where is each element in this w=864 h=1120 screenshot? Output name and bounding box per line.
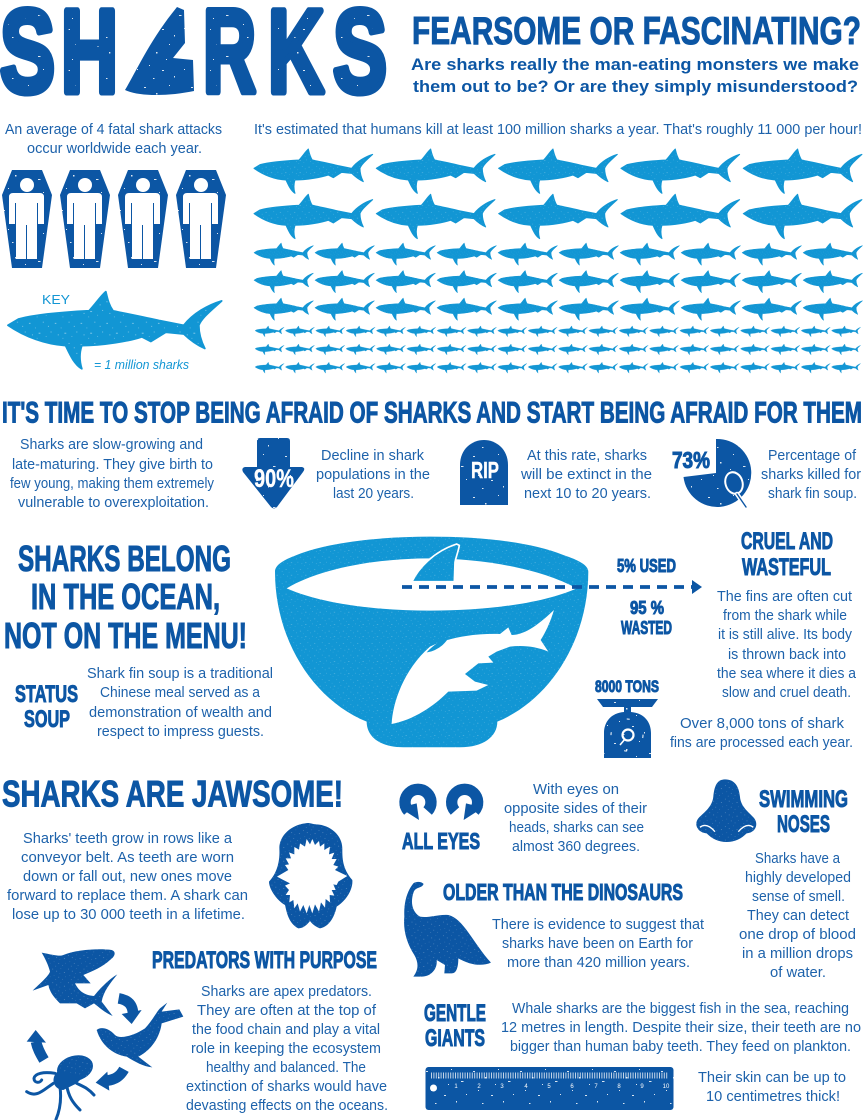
text: fatal attacks [5, 122, 222, 157]
text: teeth: forward to replace them. A shark can [7, 888, 248, 904]
chart: 73% pie with spoon: 73% [672, 447, 710, 473]
text: swimming noses: They can detect [747, 908, 849, 924]
text: status soup: Shark fin soup is a traditional [87, 666, 273, 682]
text: gentle giants: 12 metres in length. Despite their size, their teeth are no [501, 1020, 861, 1036]
chart: 73% pie with spoon [672, 439, 751, 507]
text: humans kill sharks: It's estimated that humans kill at least 100 million sharks a year. That's roughly 11 000 per hour! [254, 122, 862, 138]
heading: older than the dinosaurs: OLDER THAN THE DINOSAURS [443, 879, 683, 905]
text: extinct: At this rate, sharks [527, 448, 647, 464]
icon: dinosaur [404, 882, 491, 977]
text: all eyes: With eyes on [533, 782, 619, 798]
icon: ruler: 8 [617, 1084, 621, 1090]
text: gentle giants: Whale sharks are the biggest fish in the sea, reaching [512, 1001, 849, 1017]
arrow: seal to octopus [96, 1069, 124, 1091]
text: teeth: conveyor belt. As teeth are worn [21, 850, 234, 866]
text: skin [698, 1070, 846, 1105]
text: swimming noses: Sharks have a [755, 851, 840, 867]
arrow: octopus to shark [27, 1030, 46, 1060]
icon: ruler: 9 [640, 1084, 644, 1090]
text: cruel and wasteful: is thrown back into [728, 647, 846, 663]
heading: predators with purpose: PREDATORS WITH PURPOSE [152, 947, 377, 974]
text: teeth [7, 831, 248, 923]
text: swimming noses: in a million drops [742, 946, 853, 962]
text: decline: Decline in shark [321, 448, 425, 464]
text: predators: Sharks are apex predators. [201, 984, 372, 1000]
text: predators: They are often at the top of [197, 1003, 376, 1019]
text: fatal attacks: occur worldwide each year. [27, 141, 202, 157]
text: extinct: next 10 to 20 years. [524, 486, 651, 502]
text: fatal attacks: An average of 4 fatal shark attacks [5, 122, 222, 138]
text: 8000 tons: fins are processed each year. [670, 735, 853, 751]
heading: sharks are jawsome: SHARKS ARE JAWSOME! [2, 772, 343, 814]
text: cruel and wasteful: the sea where it dies a [717, 666, 856, 682]
heading: status soup: STATUS [15, 681, 78, 708]
icon: soup bowl with fin and shark [275, 537, 588, 747]
icon: ruler: 10 [663, 1084, 670, 1090]
pictogram: 100 sharks [254, 149, 862, 373]
text: extinct [520, 448, 652, 502]
text: gentle giants [501, 1001, 861, 1055]
text: slow-growing: vulnerable to overexploitation. [18, 495, 209, 511]
icon: RIP tombstone [460, 440, 508, 505]
text: extinct: will be extinct in the [520, 467, 652, 483]
icon: ruler: 4 [524, 1084, 528, 1090]
heading: swimming noses [759, 786, 848, 838]
heading: sharks belong in the ocean: IN THE OCEAN, [31, 576, 220, 617]
text: swimming noses [739, 851, 856, 981]
text: predators: healthy and balanced. The [206, 1060, 366, 1076]
heading: sharks belong in the ocean [4, 538, 247, 656]
heading: gentle giants: GIANTS [425, 1025, 485, 1052]
text: 8000 tons [670, 716, 853, 751]
text: cruel and wasteful: from the shark while [723, 608, 847, 624]
text: slow-growing [10, 437, 215, 511]
text: cruel and wasteful: The fins are often cut [717, 589, 852, 605]
heading: cruel and wasteful [741, 528, 833, 581]
key: KEY [42, 292, 70, 307]
heading: sharks belong in the ocean: NOT ON THE MENU! [4, 615, 247, 656]
icon: ruler: 6 [570, 1084, 574, 1090]
text: predators: role in keeping the ecosystem [191, 1041, 381, 1057]
icon: 8000 tons scale: 8000 TONS [595, 677, 659, 696]
icon: ruler: 7 [594, 1084, 598, 1090]
heading: sharks belong in the ocean: SHARKS BELONG [18, 538, 231, 579]
icon: 8000 tons scale [595, 677, 659, 758]
text: swimming noses: sense of smell. [752, 889, 845, 905]
text: skin: 10 centimetres thick! [706, 1089, 840, 1105]
text: status soup [87, 666, 273, 740]
text: decline [316, 448, 430, 502]
icon: shark [33, 949, 117, 1016]
heading: status soup: SOUP [24, 706, 70, 733]
icon: 90% down arrow: 90% [254, 465, 294, 493]
text: slow-growing: Sharks are slow-growing and [20, 437, 203, 453]
icon: octopus [27, 1051, 96, 1119]
text: cruel and wasteful: it is still alive. Its body [718, 627, 853, 643]
text: dinosaurs: sharks have been on Earth for [502, 936, 693, 952]
heading: status soup [15, 681, 78, 733]
text: status soup: demonstration of wealth and [89, 705, 272, 721]
icon: seal [97, 1003, 183, 1067]
label: 95% wasted: 95 % [630, 598, 664, 618]
text: all eyes: heads, sharks can see [509, 820, 644, 836]
text: decline: populations in the [316, 467, 430, 483]
text: slow-growing: few young, making them extremely [10, 476, 215, 492]
icon: food chain cycle [27, 949, 183, 1119]
text: status soup: Chinese meal served as a [100, 685, 260, 701]
text: decline: last 20 years. [333, 486, 414, 502]
text: fin soup percentage [761, 448, 861, 502]
label: 5% used: 5% USED [617, 556, 676, 576]
text: slow-growing: late-maturing. They give birth to [12, 457, 213, 473]
title [0, 0, 387, 118]
key [8, 292, 222, 372]
text: predators: extinction of sharks would have [186, 1079, 387, 1095]
text: dinosaurs [492, 917, 704, 971]
heading: all eyes: ALL EYES [402, 828, 480, 854]
text: status soup: respect to impress guests. [97, 724, 264, 740]
text: dinosaurs: There is evidence to suggest that [492, 917, 704, 933]
text: predators: devasting effects on the oceans. [186, 1098, 388, 1114]
text: all eyes: almost 360 degrees. [512, 839, 640, 855]
text: swimming noses: of water. [770, 965, 826, 981]
heading: gentle giants: GENTLE [424, 1000, 486, 1027]
text: swimming noses: one drop of blood [739, 927, 856, 943]
icon: ruler: 5 [547, 1084, 551, 1090]
text: gentle giants: bigger than human baby teeth. They feed on plankton. [510, 1039, 851, 1055]
text: 8000 tons: Over 8,000 tons of shark [680, 716, 845, 732]
icon: ruler [426, 1067, 674, 1110]
arrow: dashed 5% used [402, 580, 702, 594]
icon: ruler: 2 [477, 1084, 481, 1090]
header subtitle [411, 55, 859, 96]
text: all eyes [504, 782, 647, 855]
text: swimming noses: highly developed [745, 870, 851, 886]
text: all eyes: opposite sides of their [504, 801, 647, 817]
icon: shark jaw [269, 823, 352, 928]
label: 95% wasted [621, 598, 672, 638]
text: teeth: Sharks' teeth grow in rows like a [23, 831, 232, 847]
text: predators [186, 984, 388, 1114]
key: = 1 million sharks [94, 357, 189, 372]
icon: ruler: 1 [454, 1084, 458, 1090]
icon: 90% down arrow [242, 438, 304, 508]
text: dinosaurs: more than 420 million years. [507, 955, 690, 971]
arrow: shark to seal [119, 998, 142, 1024]
header subtitle: Are sharks really the man-eating monsters we make [411, 55, 859, 74]
text: teeth: down or fall out, new ones move [23, 869, 232, 885]
icon: four coffins [2, 170, 226, 268]
text: predators: the food chain and play a vital [192, 1022, 380, 1038]
text: teeth: lose up to 30 000 teeth in a lifetime. [12, 907, 245, 923]
text: skin: Their skin can be up to [698, 1070, 846, 1086]
text: fin soup percentage: shark fin soup. [768, 486, 857, 502]
icon: shark fin letter A [125, 7, 194, 95]
header subtitle: them out to be? Or are they simply misunderstood? [413, 77, 858, 96]
label: 95% wasted: WASTED [621, 618, 672, 638]
icon: all eyes arrows [400, 789, 483, 820]
heading: swimming noses: NOSES [777, 811, 830, 838]
icon: shark nose [696, 779, 756, 842]
text: cruel and wasteful: slow and cruel death. [722, 685, 851, 701]
text: cruel and wasteful [717, 589, 856, 701]
text: fin soup percentage: sharks killed for [761, 467, 861, 483]
icon: ruler: 3 [500, 1084, 504, 1090]
heading: gentle giants [424, 1000, 486, 1052]
text: fin soup percentage: Percentage of [768, 448, 856, 464]
icon: RIP tombstone: RIP [471, 457, 499, 483]
